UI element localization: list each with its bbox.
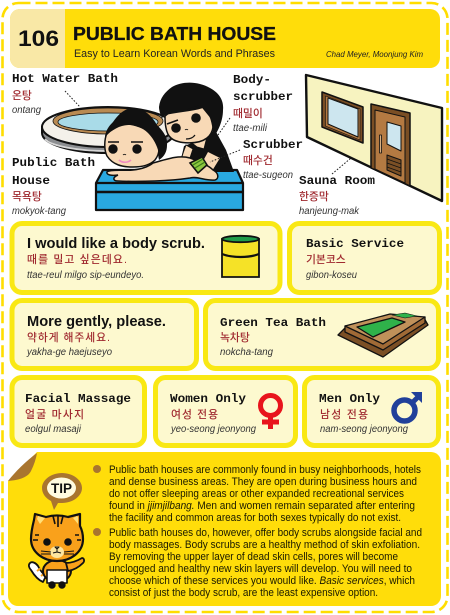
icon: bullet 2: [93, 528, 101, 536]
panel: men only: nam-seong jeonyong: [320, 424, 409, 435]
panel: green tea bath: nokcha-tang: [220, 347, 274, 358]
tip paragraph 1: do not offer sleeping areas or other expanded recreational services: [109, 488, 404, 500]
icon: bullet 1: [93, 465, 101, 473]
panel: green tea bath: Green Tea Bath: [220, 316, 326, 330]
panel: facial massage: [12, 378, 144, 446]
label: sauna room: [299, 174, 375, 217]
panel: facial massage: eolgul masaji: [25, 424, 82, 435]
page fold: [8, 453, 37, 481]
header banner: [10, 9, 440, 68]
label: public bath house: [12, 156, 95, 217]
label: hot water bath: ontang: [12, 105, 42, 116]
label: body-scrubber: [233, 73, 293, 134]
label: body-scrubber: Body-: [233, 73, 271, 87]
lesson number: 106: [18, 26, 59, 51]
panel: men only: Men Only: [319, 392, 381, 406]
panel: women only: 여성 전용: [171, 408, 218, 421]
label: scrubber: ttae-sugeon: [243, 170, 293, 181]
panel: basic service: [290, 224, 440, 292]
label: sauna room: hanjeung-mak: [299, 206, 360, 217]
label: sauna room: Sauna Room: [299, 174, 375, 188]
illustration: sauna room wall: [306, 75, 442, 201]
illustration: blue mat: [96, 170, 243, 210]
panel: tip: [8, 452, 441, 606]
tip paragraph 2: By removing the upper layer of dead skin cells, pores will become: [109, 551, 398, 563]
icon: tiger cat mascot: [29, 514, 84, 588]
icon: scrub cup: [222, 236, 259, 277]
label: public bath house: 목욕탕: [12, 190, 42, 203]
panel: women only: yeo-seong jeonyong: [170, 424, 257, 435]
panel: facial massage: Facial Massage: [25, 392, 131, 406]
tip paragraph 1: found in jjimjilbang. Men and women remain separated after entering: [109, 500, 415, 512]
label: body-scrubber: ttae-mili: [233, 123, 268, 134]
label: scrubber: Scrubber: [243, 138, 303, 152]
label: scrubber: [243, 138, 303, 181]
illustration: lying person: [105, 108, 218, 181]
label: hot water bath: 온탕: [12, 89, 32, 102]
title: PUBLIC BATH HOUSE: [73, 23, 276, 44]
panel: more gently: 약하게 해주세요.: [27, 330, 110, 344]
illustration: scrub mitt: [190, 157, 207, 173]
authors: Chad Meyer, Moonjung Kim: [326, 49, 423, 59]
tip paragraph 2: consist of just the body scrub, are the least expensive option.: [109, 587, 378, 599]
icon: TIP speech bubble: TIP: [51, 481, 72, 496]
label: body-scrubber: 때밀이: [233, 106, 263, 120]
icon: male symbol: [394, 392, 422, 421]
label: public bath house: Public Bath: [12, 156, 95, 170]
panel: more gently: More gently, please.: [27, 313, 166, 330]
icon: female symbol: [260, 396, 280, 429]
label: hot water bath: Hot Water Bath: [12, 72, 118, 86]
panel: basic service: Basic Service: [306, 237, 404, 251]
panel: green tea bath: [206, 300, 438, 368]
tip paragraph 1: the facility and common areas for both sexes typically do not exist.: [109, 512, 401, 524]
panel: men only: [304, 378, 438, 446]
subtitle: Easy to Learn Korean Words and Phrases: [74, 48, 275, 60]
illustration: hot water bath: [42, 107, 174, 153]
illustration: scrubber person: [159, 83, 234, 172]
label: scrubber: 때수건: [243, 153, 273, 167]
panel: women only: [156, 378, 296, 446]
panel: facial massage: 얼굴 마사지: [25, 407, 84, 421]
tip paragraph 2: unclogged and healthy new skin layers will develop. You will need to: [109, 563, 412, 575]
dotted leader lines: [65, 91, 357, 174]
label: hot water bath: [12, 72, 118, 116]
tip paragraph 1: [109, 464, 421, 524]
icon: green tea bath: [338, 313, 428, 357]
icon: TIP speech bubble: [42, 473, 82, 510]
tip paragraph 1: and dense business areas. They are open during business hours and: [109, 476, 417, 488]
panel: I would like a body scrub: [12, 224, 280, 292]
panel: more gently: [12, 300, 196, 368]
door: [371, 104, 410, 186]
tip paragraph 2: choose which of these services you would like. Basic services, which: [109, 575, 415, 587]
label: body-scrubber: scrubber: [233, 90, 293, 104]
label: public bath house: mokyok-tang: [12, 206, 67, 217]
panel: green tea bath: 녹차탕: [220, 331, 250, 344]
panel: basic service: gibon-koseu: [306, 270, 358, 281]
label: public bath house: House: [12, 174, 50, 188]
panel: I would like a body scrub: I would like a body scrub.: [27, 235, 205, 252]
tip paragraph 2: [109, 527, 422, 599]
window: [322, 92, 363, 143]
panel: men only: 남성 전용: [320, 408, 368, 421]
panel: I would like a body scrub: 때를 밀고 싶은데요.: [27, 252, 127, 266]
panel: I would like a body scrub: ttae-reul milgo sip-eundeyo.: [27, 270, 144, 281]
panel: basic service: 기본코스: [306, 253, 346, 266]
panel: more gently: yakha-ge haejuseyo: [26, 347, 113, 358]
panel: women only: Women Only: [170, 392, 247, 406]
label: sauna room: 한증막: [299, 190, 329, 203]
